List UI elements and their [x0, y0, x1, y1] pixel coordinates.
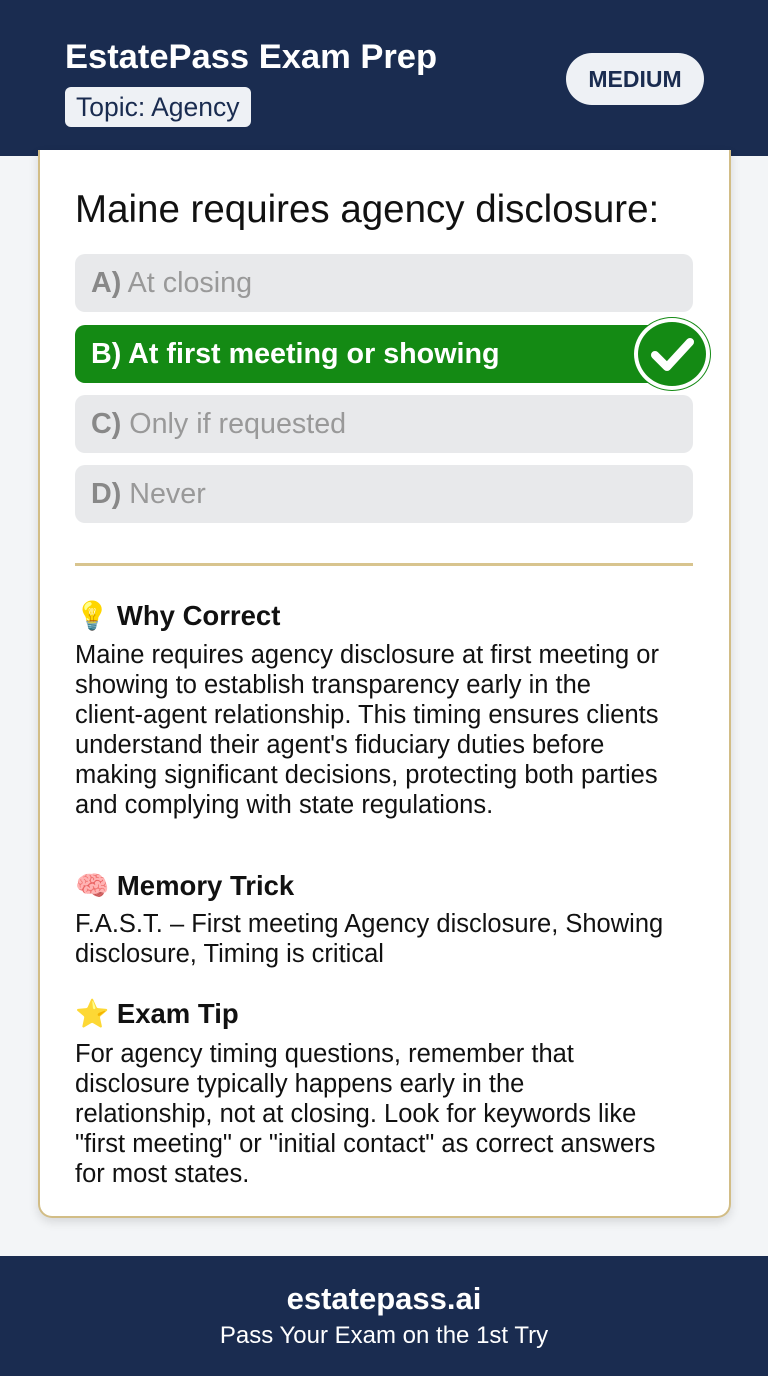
text: explanation: client-agent relationship. This timing ensures clients: [75, 701, 658, 729]
option D: [75, 465, 693, 523]
difficulty badge: MEDIUM: [588, 66, 682, 92]
option B correct: B) At first meeting or showing: [91, 338, 500, 370]
topic badge: [65, 87, 251, 127]
topic badge: Topic: Agency: [76, 92, 240, 122]
text: exam tip: "first meeting" or "initial contact" as correct answers: [75, 1130, 655, 1158]
option B correct: [75, 325, 693, 383]
text: exam tip: disclosure typically happens early in the: [75, 1070, 524, 1098]
text: exam tip: for most states.: [75, 1160, 249, 1188]
option C: C) Only if requested: [91, 408, 346, 440]
footer site: estatepass.ai: [287, 1281, 481, 1316]
text: exam tip: relationship, not at closing. Look for keywords like: [75, 1100, 636, 1128]
option C: [75, 395, 693, 453]
text: exam tip: [75, 1040, 655, 1188]
heading: memory trick: 🧠 Memory Trick: [75, 870, 294, 901]
icon: check: [634, 318, 710, 390]
heading: why correct: 💡 Why Correct: [75, 600, 280, 631]
panel: question card: [38, 150, 731, 1218]
footer tagline: Pass Your Exam on the 1st Try: [220, 1322, 548, 1349]
text: explanation: understand their agent's fiduciary duties before: [75, 731, 604, 759]
text: explanation: and complying with state regulations.: [75, 791, 493, 819]
title: EstatePass Exam Prep: [65, 38, 437, 76]
heading: exam tip: ⭐ Exam Tip: [75, 998, 239, 1029]
difficulty badge: [566, 53, 704, 105]
text: memory trick: F.A.S.T. – First meeting Agency disclosure, Showing: [75, 910, 663, 938]
footer: [0, 1256, 768, 1376]
option A: [75, 254, 693, 312]
text: memory trick: disclosure, Timing is critical: [75, 940, 384, 968]
question: Maine requires agency disclosure:: [75, 188, 659, 231]
option A: A) At closing: [91, 267, 252, 299]
option D: D) Never: [91, 478, 206, 510]
header: [0, 0, 768, 156]
text: explanation: Maine requires agency disclosure at first meeting or: [75, 641, 659, 669]
text: exam tip: For agency timing questions, remember that: [75, 1040, 574, 1068]
text: explanation: making significant decisions, protecting both parties: [75, 761, 658, 789]
text: explanation: showing to establish transparency early in the: [75, 671, 591, 699]
text: explanation: [75, 641, 659, 819]
text: memory trick: [75, 910, 663, 968]
